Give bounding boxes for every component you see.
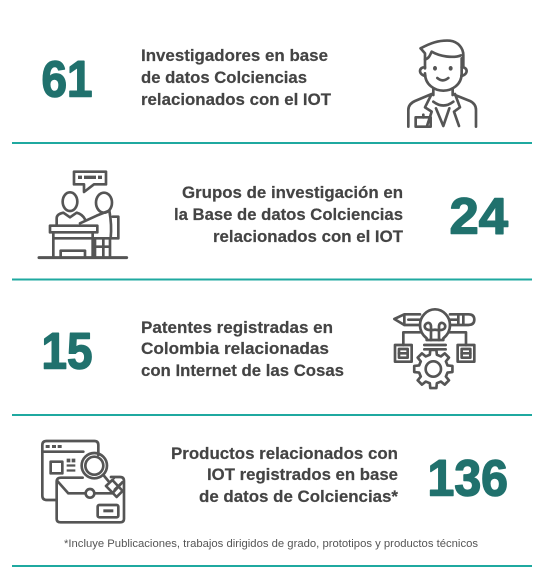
text: patents description bbox=[141, 318, 344, 380]
panel: research groups bbox=[39, 172, 509, 258]
text: research groups description: relacionados con el IOT bbox=[213, 227, 404, 246]
text: products description: de datos de Colciencias* bbox=[199, 487, 398, 506]
panel: products bbox=[42, 441, 508, 550]
text: researchers description bbox=[141, 46, 332, 109]
icon: browser window, folder and magnifying glass bbox=[42, 441, 124, 522]
text: research groups description bbox=[174, 183, 404, 246]
text: patents description: Colombia relacionadas bbox=[141, 339, 329, 358]
number: 61: 61 bbox=[42, 50, 92, 108]
text: researchers description: Investigadores en base bbox=[141, 46, 328, 65]
text: research groups description: Grupos de investigación en bbox=[182, 183, 403, 202]
number: 15: 15 bbox=[42, 322, 92, 380]
icon: researcher in lab coat bbox=[408, 41, 476, 127]
footnote: *Incluye Publicaciones, trabajos dirigidos de grado, prototipos y productos técnicos bbox=[64, 538, 479, 550]
text: patents description: con Internet de las Cosas bbox=[141, 361, 344, 380]
text: research groups description: la Base de datos Colciencias bbox=[174, 205, 403, 224]
text: researchers description: relacionados con el IOT bbox=[141, 90, 332, 109]
icon: two people at a desk with speech bubble bbox=[39, 172, 127, 258]
icon: bulb, pencil and gear bbox=[394, 309, 474, 388]
text: researchers description: de datos Colciencias bbox=[141, 68, 307, 87]
number: 24: 24 bbox=[450, 188, 509, 244]
text: products description bbox=[171, 444, 398, 506]
text: patents description: Patentes registradas en bbox=[141, 318, 333, 337]
panel: researchers bbox=[42, 41, 476, 127]
panel: patents bbox=[42, 309, 474, 388]
number: 136: 136 bbox=[428, 450, 508, 506]
text: products description: IOT registrados en base bbox=[207, 465, 398, 484]
text: products description: Productos relacionados con bbox=[171, 444, 398, 463]
